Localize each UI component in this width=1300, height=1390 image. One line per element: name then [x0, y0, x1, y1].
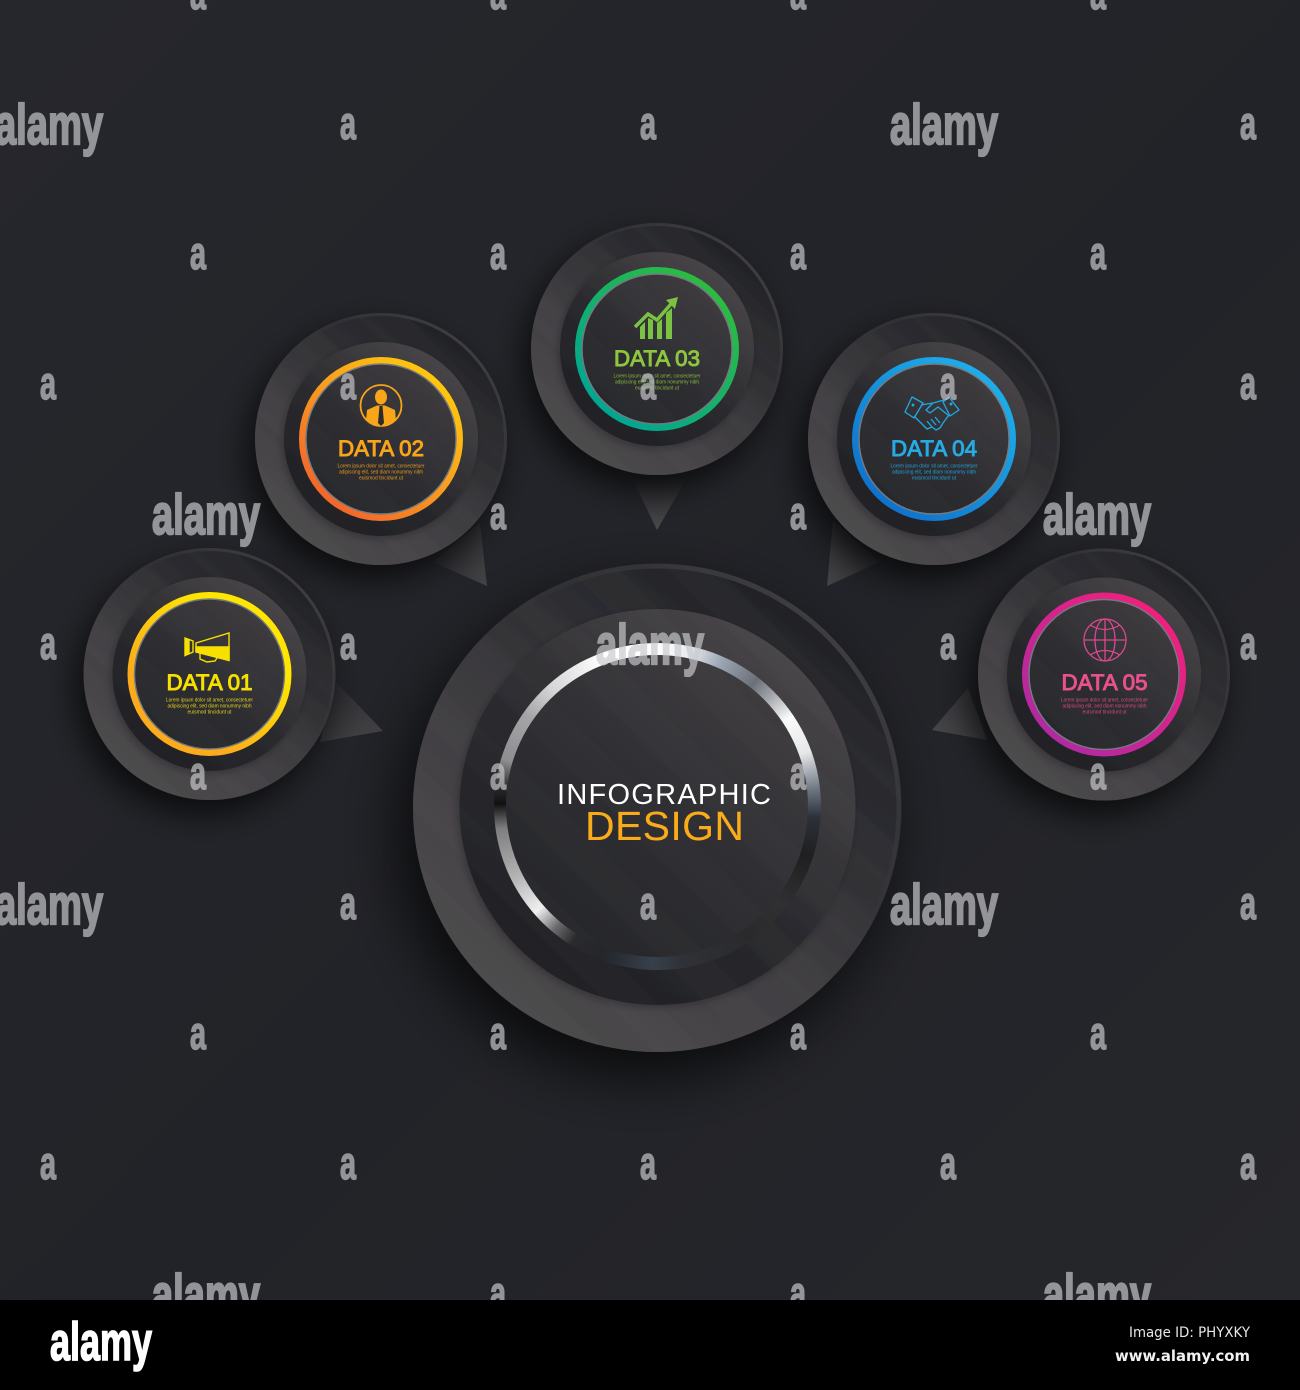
watermark pattern: a	[1240, 357, 1256, 409]
body text: Lorem ipsum dolor sit amet, consectetuer	[614, 374, 701, 380]
watermark pattern: a	[940, 1137, 956, 1189]
watermark pattern: a	[490, 227, 506, 279]
watermark pattern: a	[640, 877, 656, 929]
hub inner disc	[506, 655, 808, 957]
watermark pattern: a	[40, 357, 56, 409]
body text	[614, 374, 701, 392]
watermark pattern: a	[1090, 747, 1106, 799]
body text: adipiscing elit, sed diam nonummy nibh	[892, 470, 976, 476]
body text	[890, 464, 978, 482]
watermark pattern: a	[40, 617, 56, 669]
watermark pattern: alamy	[152, 483, 260, 547]
watermark pattern: a	[790, 227, 806, 279]
watermark pattern: alamy	[596, 613, 704, 677]
body text: Lorem ipsum dolor sit amet, consectetuer	[166, 698, 253, 704]
icon: megaphone	[185, 633, 229, 662]
title: infographic design: DESIGN	[585, 803, 744, 849]
watermark pattern: a	[340, 357, 356, 409]
label: data 03: DATA 03	[614, 346, 700, 371]
body text: adipiscing elit, sed diam nonummy nibh	[168, 704, 252, 710]
label: data 02: DATA 02	[338, 436, 424, 461]
label: data 01: DATA 01	[166, 670, 252, 695]
watermark pattern: a	[1240, 1137, 1256, 1189]
watermark pattern: a	[1090, 1007, 1106, 1059]
body text: adipiscing elit, sed diam nonummy nibh	[339, 470, 423, 476]
panel: central hub	[413, 564, 901, 1052]
watermark pattern: a	[340, 617, 356, 669]
watermark pattern: a	[1240, 877, 1256, 929]
watermark pattern: a	[640, 357, 656, 409]
body text: euismod tincidunt ut	[188, 710, 232, 716]
watermark pattern: a	[790, 1007, 806, 1059]
panel: data 02	[255, 313, 507, 565]
icon: handshake	[905, 397, 959, 430]
pointer triangles	[320, 478, 987, 742]
panel: data 03	[531, 223, 783, 475]
watermark pattern: alamy	[890, 93, 998, 157]
body text: adipiscing elit, sed diam nonummy nibh	[615, 380, 699, 386]
body text: Lorem ipsum dolor sit amet, consectetuer	[1061, 698, 1148, 704]
watermark pattern: a	[340, 877, 356, 929]
watermark pattern: a	[340, 1137, 356, 1189]
watermark pattern: alamy	[1043, 483, 1151, 547]
body text: Lorem ipsum dolor sit amet, consectetuer	[890, 464, 978, 470]
body text: Lorem ipsum dolor sit amet, consectetuer	[338, 464, 425, 470]
metallic ring	[494, 643, 821, 970]
body text: adipiscing elit, sed diam nonummy nibh	[1062, 704, 1146, 710]
hub outer disc	[413, 564, 901, 1052]
watermark pattern: a	[790, 747, 806, 799]
watermark pattern: a	[940, 357, 956, 409]
watermark pattern: a	[940, 617, 956, 669]
watermark pattern: a	[790, 487, 806, 539]
watermark pattern: a	[790, 1267, 806, 1319]
body text	[338, 464, 425, 482]
watermark pattern: a	[1240, 97, 1256, 149]
panel: data 05	[978, 548, 1230, 800]
label: data 05: DATA 05	[1062, 670, 1148, 695]
watermark pattern: a	[490, 1267, 506, 1319]
panel: data 04	[808, 313, 1060, 565]
watermark pattern: a	[190, 1007, 206, 1059]
watermark pattern: a	[490, 487, 506, 539]
body text: euismod tincidunt ut	[1082, 710, 1127, 716]
body text: euismod tincidunt ut	[912, 476, 956, 482]
watermark pattern: alamy	[1043, 1263, 1151, 1327]
label: data 04: DATA 04	[891, 436, 977, 461]
watermark pattern: a	[640, 97, 656, 149]
title: infographic design: INFOGRAPHIC	[557, 779, 771, 811]
title: infographic design	[557, 779, 771, 849]
watermark pattern: a	[640, 1137, 656, 1189]
icon: globe	[1084, 619, 1126, 661]
watermark pattern: alamy	[152, 1263, 260, 1327]
body text	[166, 698, 253, 716]
panel: data 01	[84, 548, 336, 800]
watermark pattern: a	[490, 1007, 506, 1059]
body text	[1061, 698, 1148, 716]
watermark pattern: a	[1090, 227, 1106, 279]
watermark pattern: a	[1240, 617, 1256, 669]
footer logo: alamy	[50, 1312, 152, 1372]
image id: Image ID: PHYXKY	[1129, 1325, 1250, 1341]
hub middle disc	[460, 609, 856, 1005]
watermark pattern: a	[490, 747, 506, 799]
watermark pattern: a	[40, 1137, 56, 1189]
icon: rising chart	[635, 297, 678, 339]
watermark pattern: a	[340, 97, 356, 149]
body text: euismod tincidunt ut	[635, 386, 679, 392]
watermark pattern: a	[190, 747, 206, 799]
watermark pattern: alamy	[890, 873, 998, 937]
icon: businessman	[360, 385, 402, 426]
footer band	[0, 1300, 1300, 1390]
watermark pattern: a	[190, 227, 206, 279]
website: www.alamy.com	[1115, 1347, 1250, 1365]
body text: euismod tincidunt ut	[359, 476, 403, 482]
